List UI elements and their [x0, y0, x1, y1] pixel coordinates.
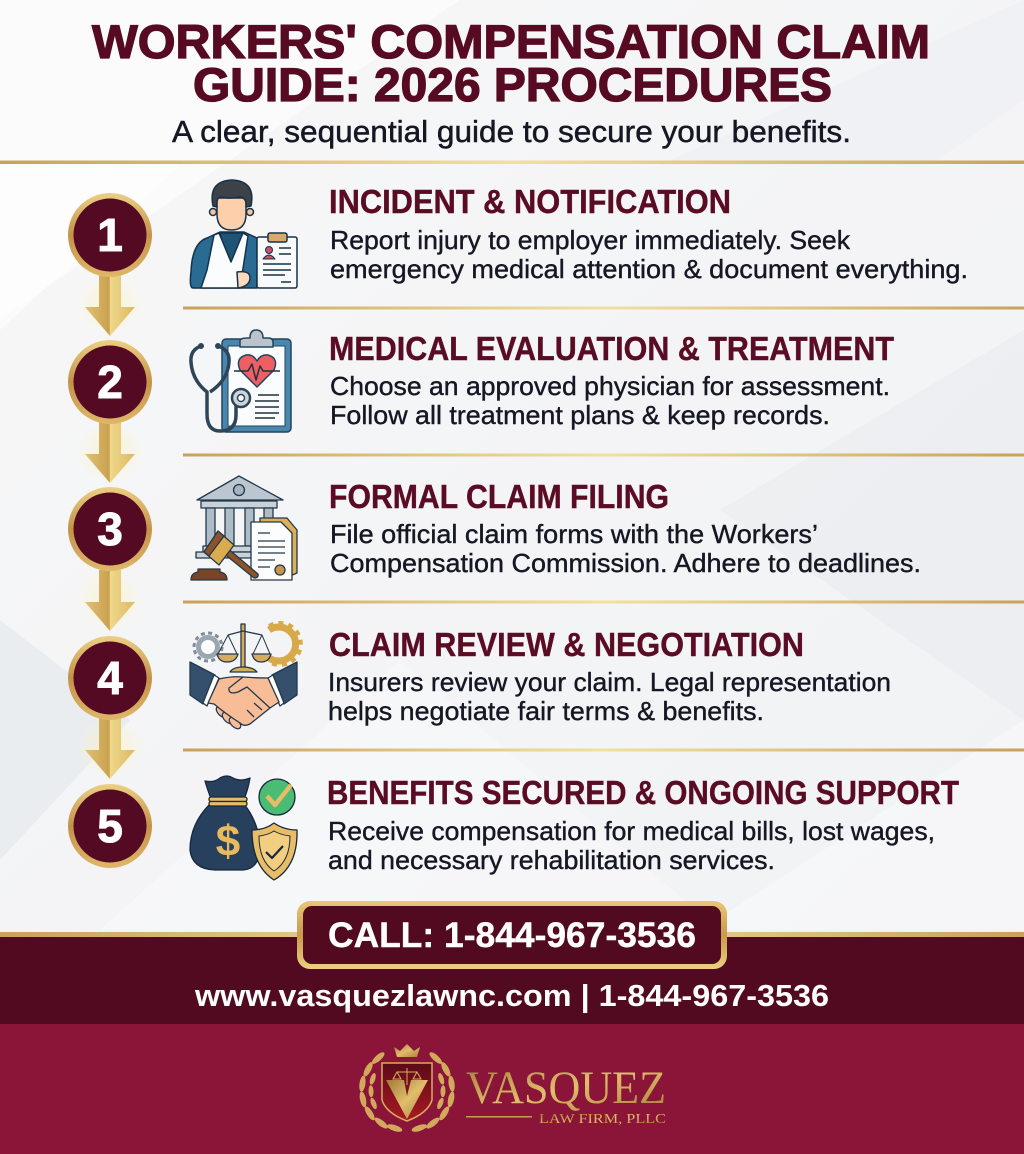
step 5 text: Receive compensation for medical bills, lost wages,: [328, 816, 935, 846]
arrow: step 2 to 3: [76, 422, 144, 483]
icon: courthouse, gavel and documents: [191, 476, 297, 580]
step badge 5: 5: [97, 800, 123, 852]
step 1 text: INCIDENT & NOTIFICATION: [329, 183, 731, 220]
icon: money bag, check and shield: $: [216, 817, 240, 866]
arrow: step 3 to 4: [76, 570, 144, 631]
step 2 text: Choose an approved physician for assessment.: [330, 371, 890, 401]
step 5 text: and necessary rehabilitation services.: [328, 845, 775, 875]
title: WORKERS' COMPENSATION CLAIM: [92, 15, 930, 68]
icon: scales, gears and handshake: [190, 623, 301, 731]
step 4 text: CLAIM REVIEW & NEGOTIATION: [329, 626, 804, 663]
step 5 text: BENEFITS SECURED & ONGOING SUPPORT: [327, 774, 959, 811]
step badge 5: [68, 784, 152, 868]
step 3 text: File official claim forms with the Workers’: [330, 519, 818, 549]
footer contact band: [0, 932, 1024, 1024]
step 1 text: Report injury to employer immediately. Seek: [330, 225, 851, 255]
step badge 1: 1: [97, 209, 123, 261]
call button: [297, 901, 727, 969]
step 2 text: MEDICAL EVALUATION & TREATMENT: [329, 330, 894, 367]
step 4 text: [328, 626, 891, 726]
arrow: step 4 to 5: [76, 718, 144, 779]
arrow: step 1 to 2: [76, 275, 144, 336]
logo crest: [358, 1044, 456, 1133]
step 4 text: Insurers review your claim. Legal representation: [328, 667, 891, 697]
step 1 text: [329, 183, 968, 284]
step 2 text: Follow all treatment plans & keep records.: [330, 400, 830, 430]
step badge 2: [68, 340, 152, 424]
icon: stethoscope and medical clipboard: [191, 330, 291, 432]
subtitle: A clear, sequential guide to secure your benefits.: [172, 114, 851, 149]
logo wordmark: LAW FIRM, PLLC: [539, 1112, 666, 1127]
title: GUIDE: 2026 PROCEDURES: [193, 58, 832, 111]
step 5 text: [327, 774, 959, 875]
header divider: [0, 160, 1024, 164]
step badge 2: 2: [97, 356, 123, 408]
step 1 text: emergency medical attention & document everything.: [330, 254, 968, 284]
step 3 text: [329, 478, 921, 578]
step 3 text: Compensation Commission. Adhere to deadlines.: [330, 548, 921, 578]
call button: CALL: 1-844-967-3536: [328, 916, 696, 955]
title: [92, 15, 930, 111]
step badge 1: [68, 193, 152, 277]
step 4 text: helps negotiate fair terms & benefits.: [328, 696, 764, 726]
step badge 4: 4: [97, 652, 123, 704]
step badge 4: [68, 636, 152, 720]
icon: money bag, check and shield: [190, 776, 297, 880]
step 2 text: [329, 330, 894, 430]
step badge 3: [68, 487, 152, 571]
logo band: [0, 1024, 1024, 1154]
step 3 text: FORMAL CLAIM FILING: [329, 478, 669, 515]
website and phone line: www.vasquezlawnc.com | 1-844-967-3536: [194, 978, 829, 1013]
step badge 3: 3: [97, 503, 123, 555]
logo wordmark: VASQUEZ: [466, 1062, 666, 1114]
icon: injured worker with clipboard: [190, 180, 297, 288]
logo: Vasquez Law Firm: [358, 1044, 666, 1133]
